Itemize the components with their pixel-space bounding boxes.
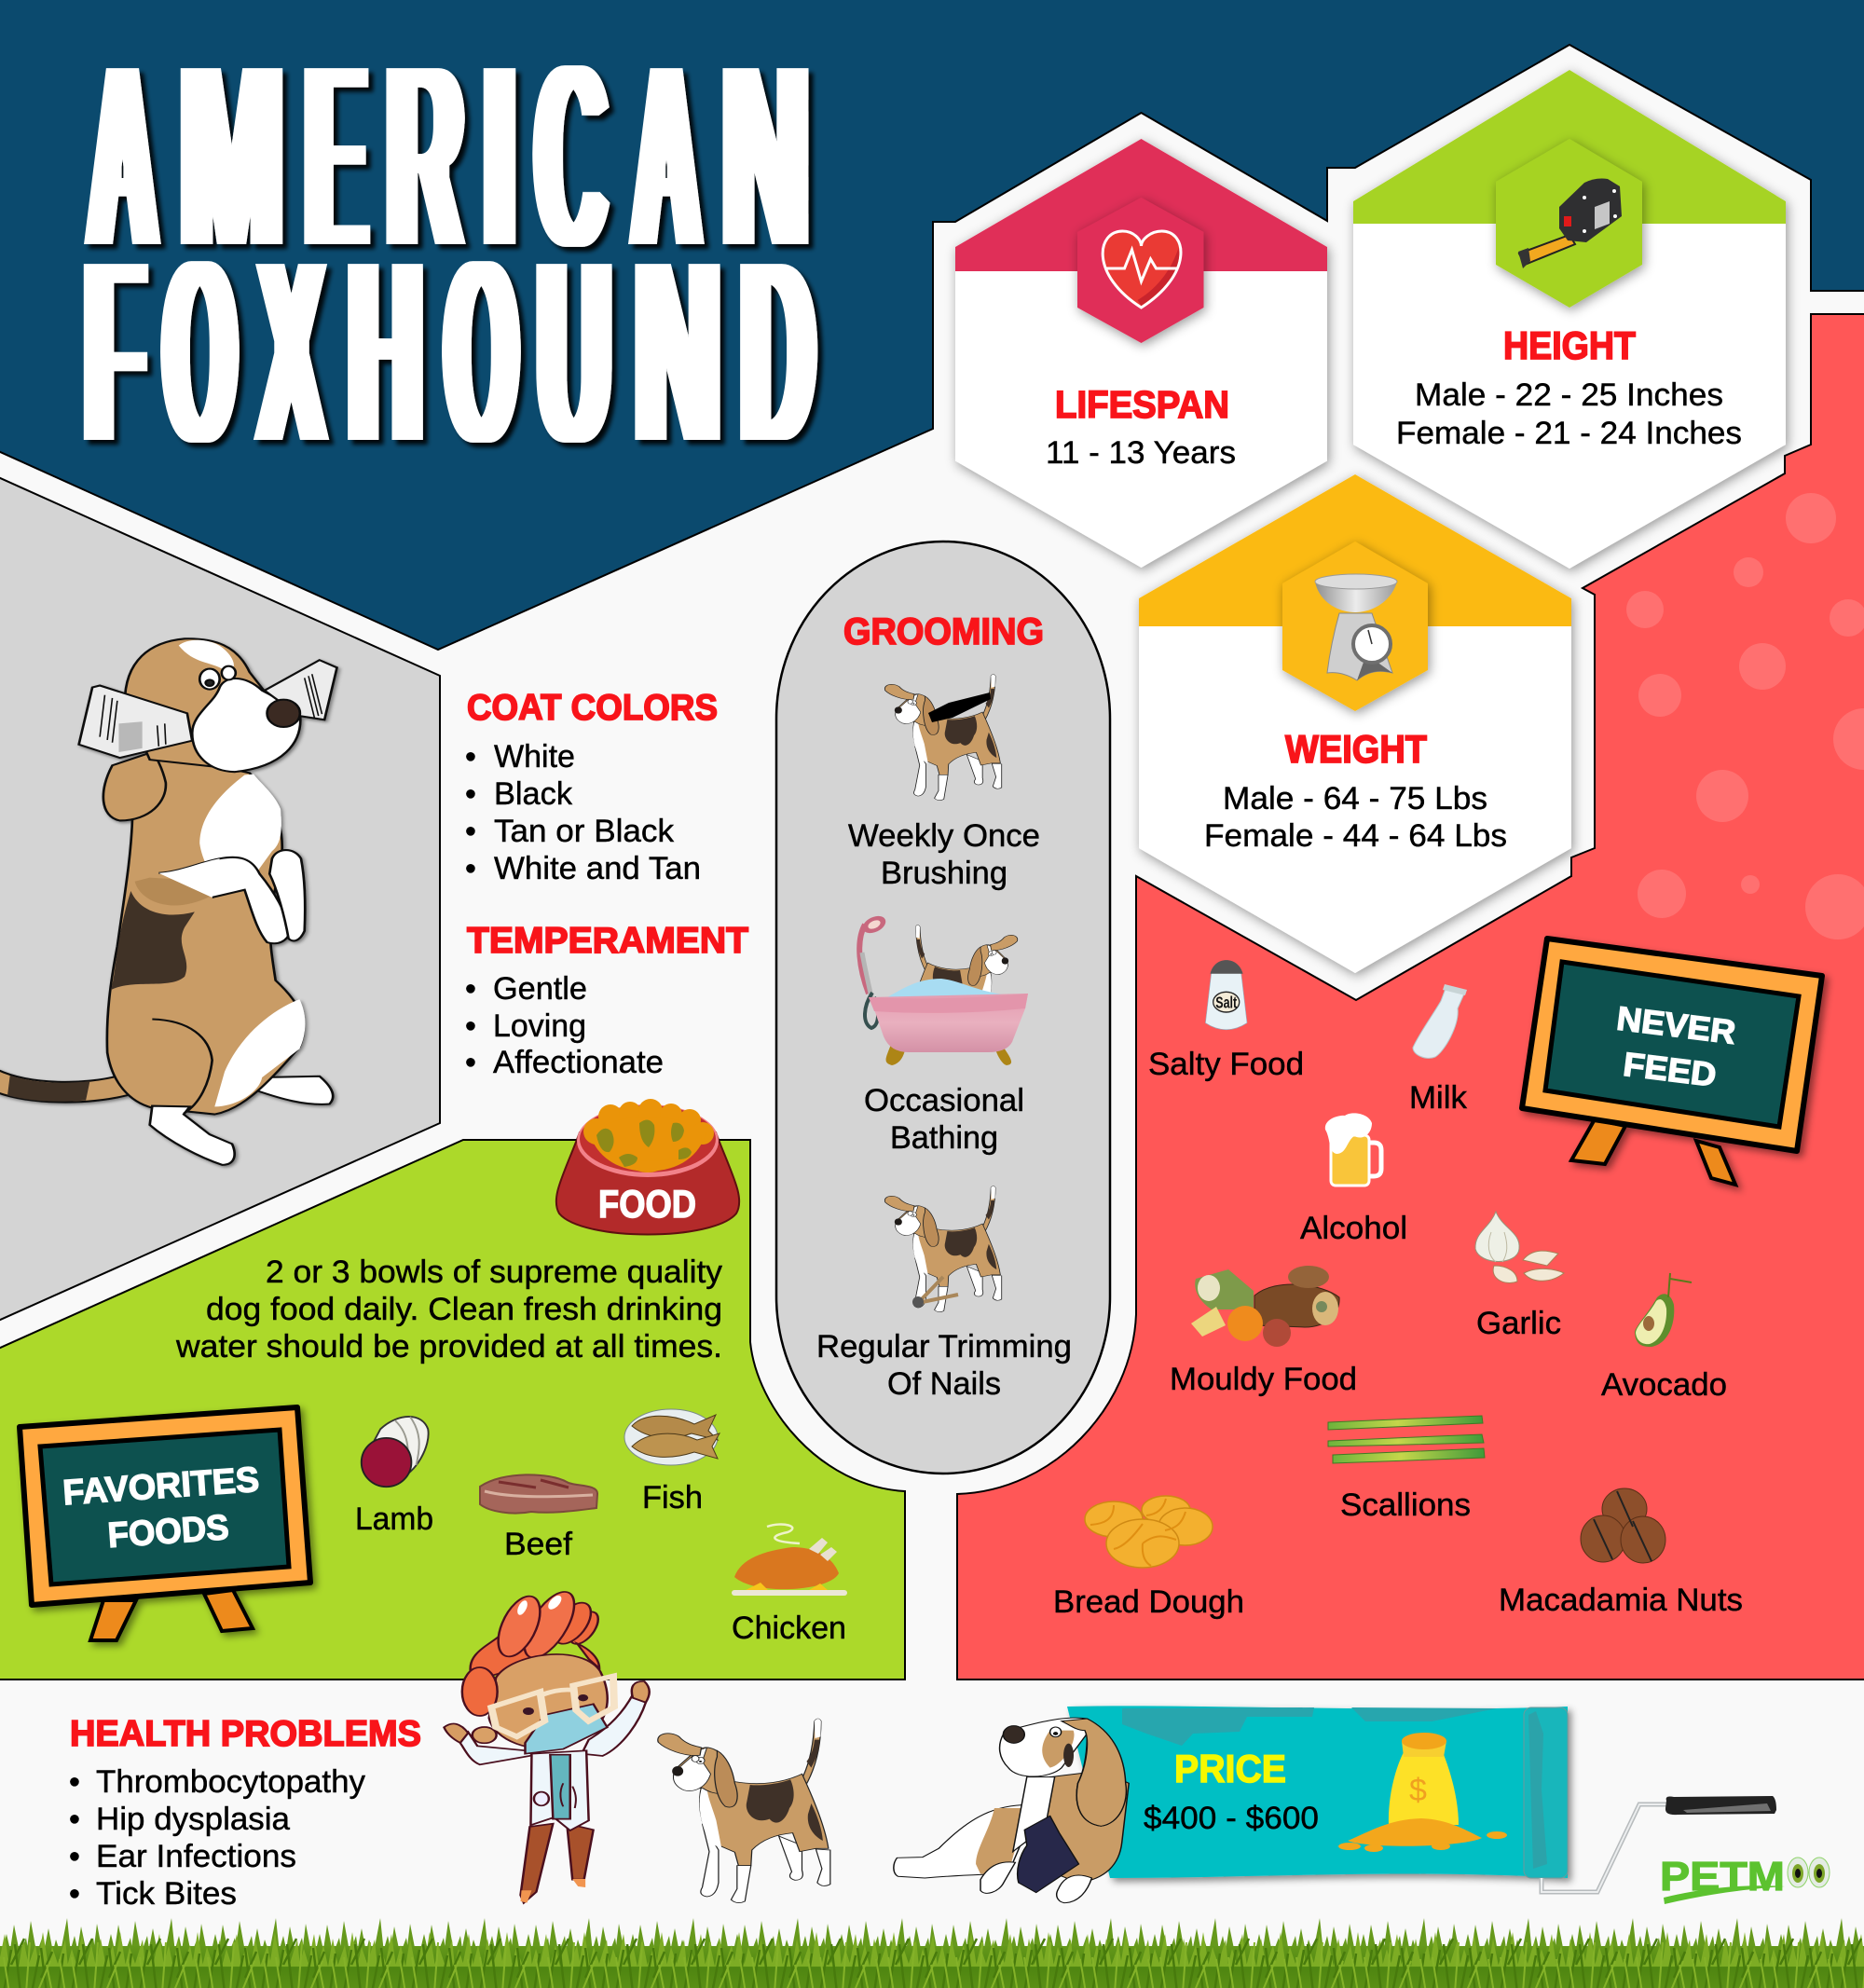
text: food description [175,1254,722,1364]
list: health problems: • [69,1839,80,1874]
icon: roast chicken [732,1525,847,1596]
title: E [307,4,365,308]
title: F [86,199,144,503]
list: health problems: Tick Bites [96,1876,237,1912]
list: coat colors: • [465,739,476,775]
list: temperament: Affectionate [493,1045,664,1080]
heading: grooming: GROOMING [843,611,1044,652]
label: salty food: Salty Food [1148,1047,1304,1082]
list: coat colors: • [465,851,476,886]
icon: beef [480,1474,597,1514]
panel: height hexagon [1353,70,1786,569]
beagle standing [658,1719,830,1903]
list: health problems: Thrombocytopathy [96,1764,365,1800]
title: R [388,4,462,308]
icon: salt shaker [1205,960,1247,1030]
text: N [723,4,808,308]
title: N [636,199,720,503]
chalkboard: favorites foods: FOODS [106,1508,230,1556]
text: weight values: Male - 64 - 75 Lbs [1223,781,1487,816]
icon: milk bottle [1413,984,1467,1058]
text: nail trimming [816,1329,1072,1402]
panel: lifespan hexagon [955,139,1327,568]
grass strip [0,1915,1864,1988]
title: C [537,4,606,308]
text: weight values: Female - 44 - 64 Lbs [1204,818,1507,854]
list: coat colors: Black [494,776,573,812]
title: O [165,199,235,503]
list: coat colors: White [494,739,575,775]
list: coat colors: White and Tan [494,851,701,886]
text: price value: $400 - $600 [1144,1801,1319,1836]
heading: price: PRICE [1174,1747,1286,1790]
never feed items [1053,960,1743,1620]
label: milk: Milk [1409,1080,1468,1116]
text: height values: Female - 21 - 24 Inches [1396,416,1742,451]
title: M [181,4,282,308]
heading: temperament: TEMPERAMENT [467,921,748,961]
text: coat colors [465,688,718,886]
title [86,4,814,503]
label: scallions: Scallions [1340,1488,1471,1523]
icon: heart [1103,231,1181,308]
icon: food bowl [556,1099,739,1234]
label: alcohol: Alcohol [1300,1211,1407,1246]
icon: mouldy food [1191,1266,1339,1347]
label: chicken: Chicken [732,1611,846,1646]
text: weekly brushing: Brushing [881,856,1007,891]
heading: food: FOOD [598,1182,696,1226]
text: weekly brushing [848,818,1040,891]
panel: food green [0,1140,905,1680]
logo: petmoo: PETM [1660,1854,1785,1899]
icon: money bag [1338,1733,1507,1852]
chalkboard: favorites foods [20,1407,310,1640]
text: occasional bathing: Occasional [864,1083,1024,1118]
list: health problems: Hip dysplasia [96,1802,290,1837]
panel: weight hexagon [1139,474,1571,973]
favorite food items [355,1409,847,1646]
title: A [633,4,700,308]
list: coat colors [465,739,701,886]
panel: never feed red [957,314,1864,1680]
list: coat colors: Tan or Black [494,814,675,849]
title: O [446,199,516,503]
lying dog with shoe [894,1718,1129,1903]
text: height values: Male - 22 - 25 Inches [1415,377,1723,413]
text: weight values [1204,781,1507,854]
heading: lifespan: LIFESPAN [1055,383,1229,426]
icon: avocado [1635,1273,1692,1347]
text: weekly brushing: Weekly Once [848,818,1040,854]
chalkboard: never feed: FEED [1622,1045,1719,1094]
icon: dog with brush [884,675,1002,801]
text: occasional bathing: Bathing [890,1120,998,1156]
title: H [350,199,421,503]
chalkboard: never feed [1522,939,1822,1185]
list: health problems: • [69,1802,80,1837]
label: beef: Beef [504,1527,573,1562]
paint roller price banner [1067,1706,1776,1892]
icon: dog in bathtub [859,912,1028,1065]
icon: scallions [1328,1416,1485,1463]
icon: money bag: $ [1409,1773,1427,1808]
label: macadamia nuts: Macadamia Nuts [1499,1583,1743,1618]
chalkboard: favorites foods: FAVORITES [62,1460,260,1513]
text: temperament [465,921,748,1080]
list: health problems: • [69,1764,80,1800]
list: coat colors: • [465,814,476,849]
list: health problems [69,1764,365,1912]
icon: macadamia nuts [1581,1488,1665,1563]
doctor character [444,1588,650,1903]
logo: petmoo [1660,1854,1830,1904]
icon: lamb [362,1417,429,1487]
title: X [258,199,325,503]
label: avocado: Avocado [1601,1367,1727,1403]
icon: garlic [1475,1212,1564,1282]
label: garlic: Garlic [1476,1306,1561,1341]
panel: blue header [0,0,1864,650]
title: I [485,4,514,308]
label: fish: Fish [642,1480,703,1515]
chalkboard: never feed: NEVER [1614,999,1738,1051]
text: food description: 2 or 3 bowls of supreme quality [266,1254,722,1290]
list: temperament: Loving [493,1008,586,1044]
title: U [539,199,610,503]
roller paint stripe [1067,1706,1568,1878]
title: A [89,4,157,308]
list: temperament: • [465,1008,476,1044]
text: occasional bathing [864,1083,1024,1156]
label: lamb: Lamb [355,1501,433,1537]
roller handle [1542,1796,1776,1892]
text: lifespan value: 11 - 13 Years [1046,435,1236,471]
text: nail trimming: Of Nails [887,1366,1001,1402]
text: nail trimming: Regular Trimming [816,1329,1072,1364]
list: health problems: Ear Infections [96,1839,296,1874]
heading: weight: WEIGHT [1285,727,1427,771]
list: temperament [465,971,664,1080]
list: temperament: • [465,1045,476,1080]
text: D [742,199,814,503]
icon: salt shaker: Salt [1215,994,1238,1012]
list: temperament: Gentle [493,971,587,1007]
label: bread dough: Bread Dough [1053,1584,1244,1620]
icon: bread dough [1085,1496,1213,1568]
text: height values [1396,377,1742,451]
list: health problems: • [69,1876,80,1912]
panel: grooming capsule [776,542,1110,1474]
panel: grey dog panel [0,477,440,1321]
icon: tape measure [1518,179,1622,268]
icon: fish plate [624,1409,720,1465]
text: food description: dog food daily. Clean fresh drinking [206,1292,722,1327]
list: temperament: • [465,971,476,1007]
big dog with newspaper [0,638,337,1165]
heading: coat colors: COAT COLORS [467,688,718,728]
icon: beer mug [1325,1113,1381,1186]
icon: dog with nail clippers [884,1186,1002,1312]
text: food description: water should be provided at all times. [175,1329,722,1364]
icon: kitchen scale [1315,574,1397,680]
list: coat colors: • [465,776,476,812]
label: mouldy food: Mouldy Food [1170,1362,1357,1397]
heading: height: HEIGHT [1503,323,1636,367]
heading: health problems: HEALTH PROBLEMS [70,1714,421,1754]
